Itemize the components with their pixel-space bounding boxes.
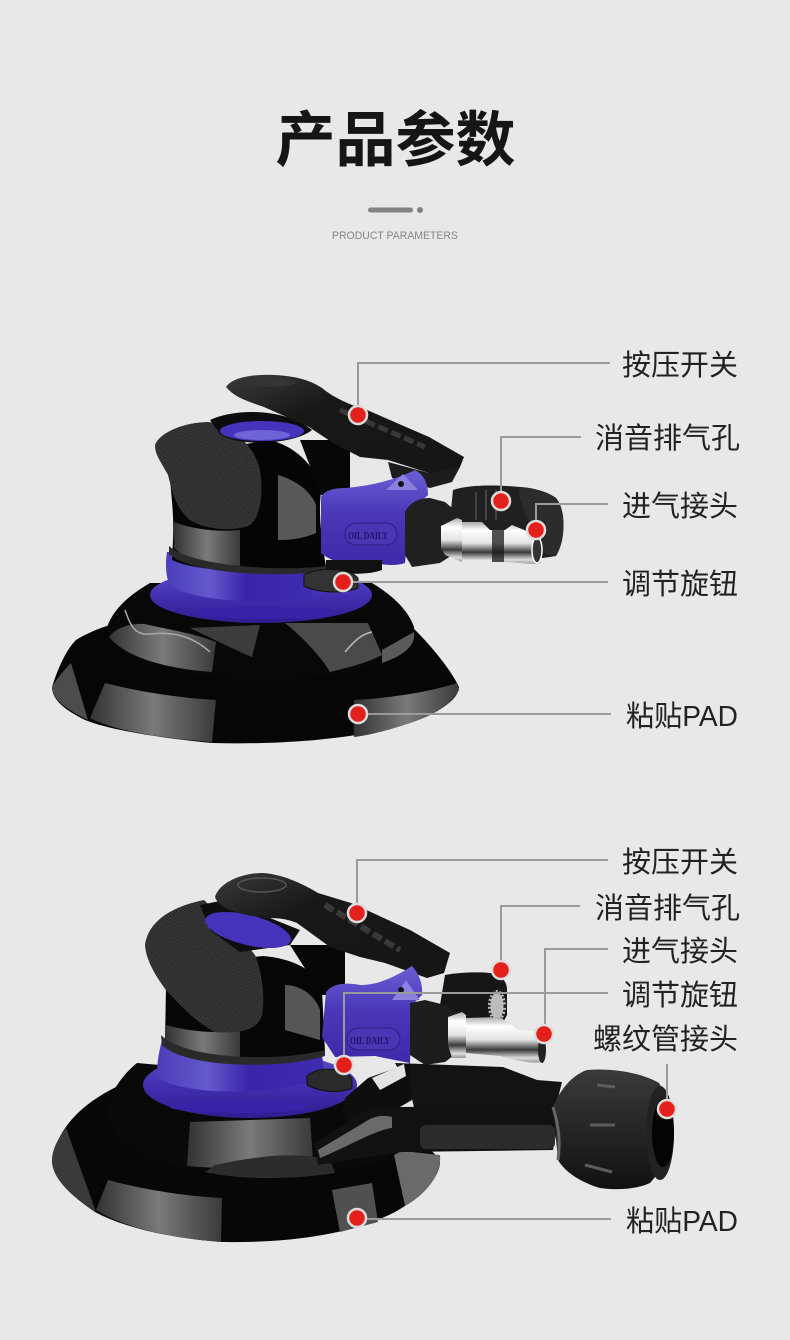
bracket under fitting bbox=[395, 1063, 562, 1112]
labels for product 1: 粘贴PAD bbox=[626, 700, 738, 733]
labels for product 2: 调节旋钮 bbox=[622, 979, 738, 1012]
labels for product 1: 按压开关 bbox=[622, 349, 738, 382]
title divider bbox=[368, 207, 423, 213]
labels for product 2 bbox=[593, 846, 740, 1238]
press switch lever bbox=[226, 375, 464, 488]
blue valve housing bbox=[321, 470, 428, 566]
motor body bbox=[169, 440, 350, 574]
grip opening bbox=[200, 900, 300, 955]
labels for product 2: 螺纹管接头 bbox=[593, 1023, 738, 1056]
labels for product 2: 进气接头 bbox=[622, 935, 738, 968]
grip opening bbox=[210, 412, 312, 443]
middle shroud bbox=[107, 1063, 400, 1178]
motor body bbox=[161, 945, 345, 1065]
grip with mesh texture bbox=[145, 900, 263, 1032]
labels for product 1: 消音排气孔 bbox=[595, 422, 740, 455]
muffler with grille bbox=[440, 972, 507, 1030]
grip with mesh texture bbox=[155, 422, 261, 529]
chrome air inlet fitting bbox=[448, 1012, 546, 1063]
subtitle: PRODUCT PARAMETERS bbox=[332, 230, 458, 242]
muffler exhaust bbox=[450, 485, 564, 560]
marker dots for product 2 bbox=[335, 904, 676, 1227]
blue ring and collar bbox=[150, 552, 372, 623]
oil daily badge: OIL DAILY bbox=[348, 530, 388, 542]
hex nut bbox=[410, 1000, 461, 1065]
oil daily badge: OIL DAILY bbox=[350, 1035, 390, 1047]
press switch lever bbox=[215, 873, 450, 978]
callouts for product 1 bbox=[343, 363, 611, 714]
blue ring and collar bbox=[143, 1040, 357, 1118]
chrome air inlet fitting bbox=[441, 518, 542, 564]
blue valve housing bbox=[322, 966, 422, 1063]
labels for product 2: 粘贴PAD bbox=[626, 1205, 738, 1238]
middle shroud bbox=[107, 583, 414, 680]
product: sander with hose bbox=[52, 873, 674, 1242]
labels for product 2: 消音排气孔 bbox=[595, 892, 740, 925]
product: sander without hose bbox=[52, 375, 564, 743]
triangular bracket bbox=[342, 1063, 412, 1130]
callouts for product 2 bbox=[344, 860, 667, 1219]
sanding pad bbox=[52, 625, 459, 743]
labels for product 1: 进气接头 bbox=[622, 490, 738, 523]
labels for product 1 bbox=[595, 349, 740, 733]
sanding pad bbox=[52, 1087, 440, 1242]
adjustment knob bbox=[307, 1069, 352, 1092]
threaded hose connector bbox=[553, 1070, 674, 1189]
adjustment knob bbox=[304, 560, 382, 592]
hex nut bbox=[405, 498, 457, 567]
marker dots for product 1 bbox=[334, 406, 545, 723]
labels for product 1: 调节旋钮 bbox=[622, 568, 738, 601]
title: 产品参数 bbox=[276, 107, 516, 174]
hose arm bbox=[314, 1105, 562, 1165]
labels for product 2: 按压开关 bbox=[622, 846, 738, 879]
